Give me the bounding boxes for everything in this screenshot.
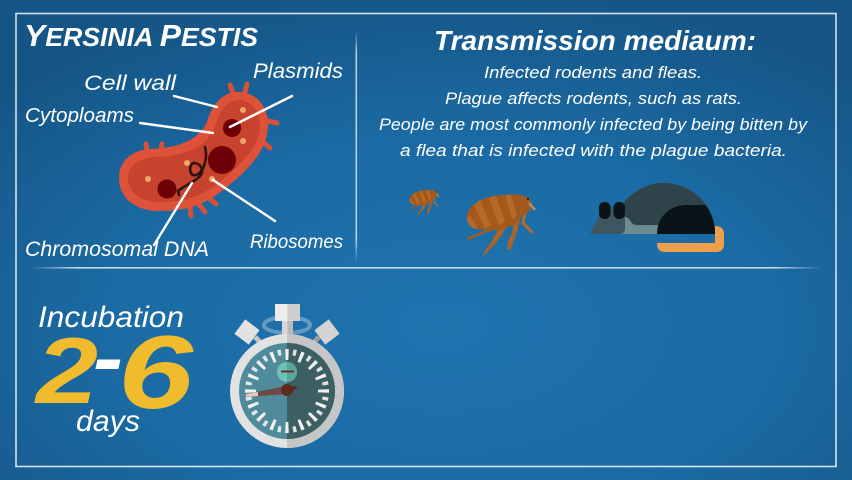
figure: 2-6: 6 (118, 315, 194, 431)
text block: transmission description: Infected rodents and fleas. (484, 63, 702, 82)
figure: 2-6 (34, 313, 194, 431)
horizontal divider (30, 267, 822, 269)
label: days: days (76, 405, 140, 438)
label: Cell wall: Cell wall (84, 72, 178, 95)
callout lines (140, 96, 292, 245)
label: Plasmids: Plasmids (253, 60, 344, 83)
text block: transmission description: People are most commonly infected by being bitten by (379, 115, 809, 134)
text block: transmission description: Plague affects rodents, such as rats. (445, 89, 742, 108)
panel: bacterium diagram (25, 60, 344, 261)
figure: 2-6: 2 (34, 318, 98, 423)
icon: rat (590, 183, 724, 252)
icon: stopwatch (230, 304, 344, 448)
icon: bacterium (119, 84, 277, 216)
label: Ribosomes: Ribosomes (250, 232, 343, 253)
text block: transmission description: a flea that is infected with the plague bacteria. (400, 141, 787, 160)
heading: Yersinia Pestis: YERSINIA PESTIS (24, 18, 259, 53)
label: Chromosomal DNA: Chromosomal DNA (25, 238, 209, 261)
icon: small flea (410, 190, 439, 216)
figure: 2-6: - (93, 313, 123, 402)
text block: transmission description (379, 63, 809, 160)
icon: large flea (467, 195, 535, 256)
vertical divider (356, 30, 357, 262)
heading: Transmission medium: Transmission mediaum: (434, 25, 756, 56)
label: Cytoploams: Cytoploams (25, 105, 134, 127)
label: Incubation: Incubation (38, 301, 184, 334)
